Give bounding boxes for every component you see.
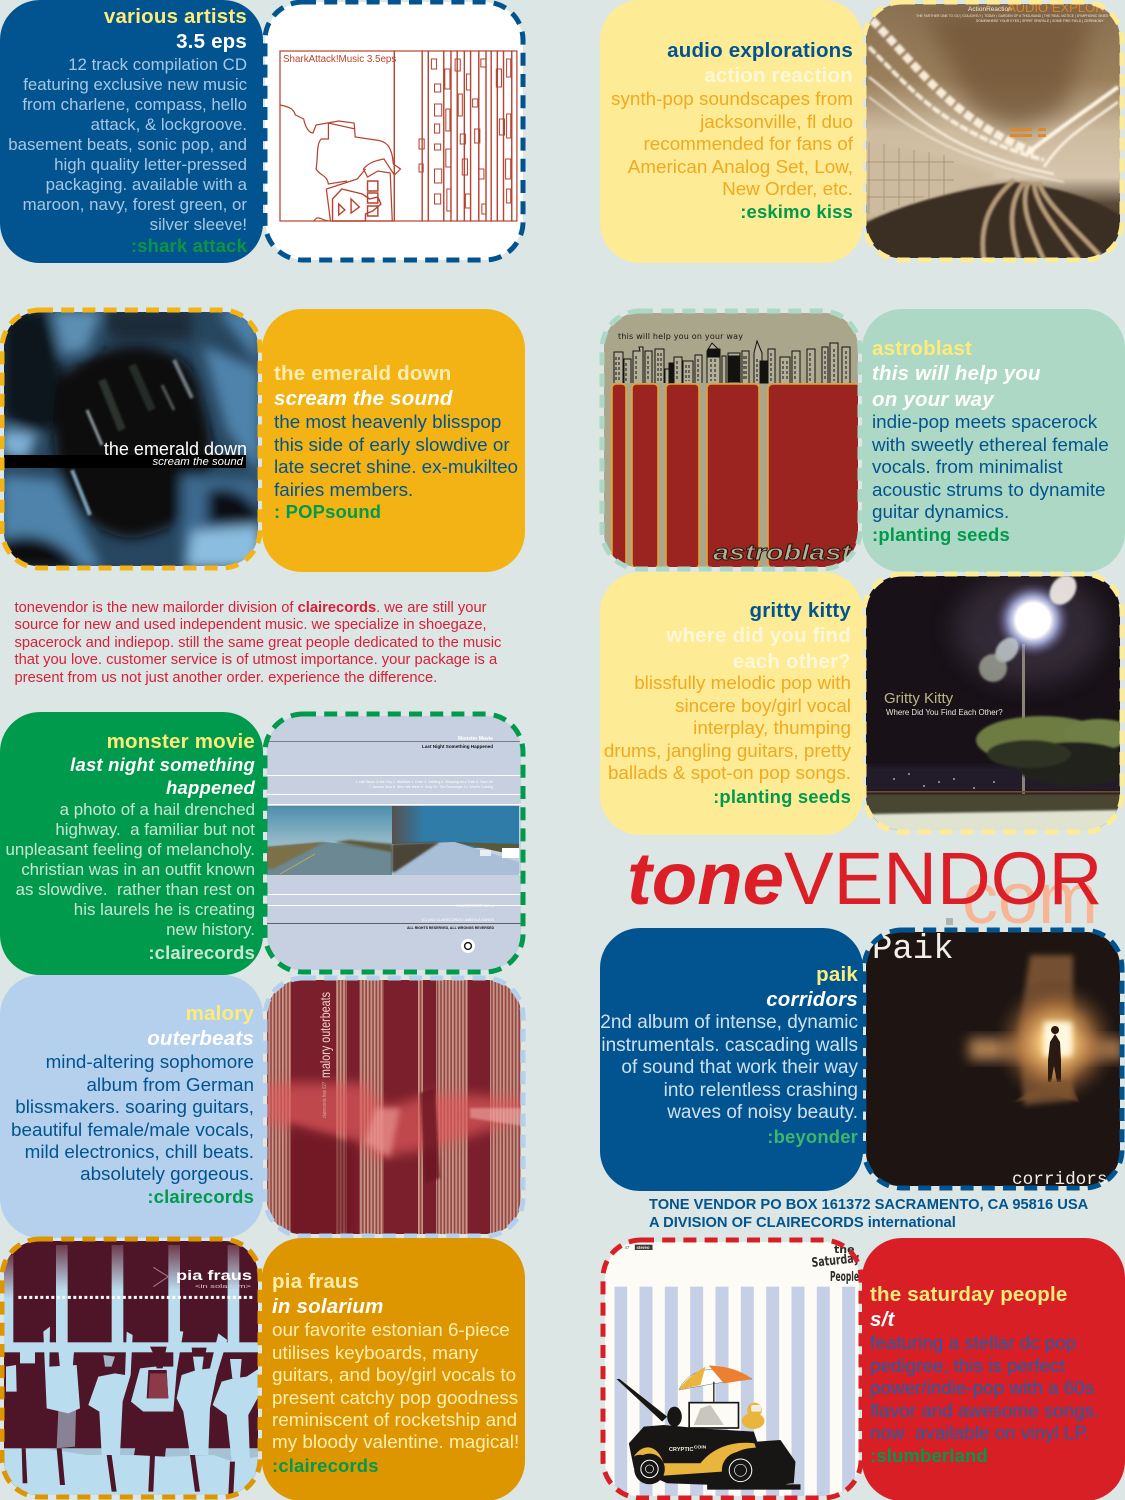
description: drums, jangling guitars, pretty	[604, 740, 851, 761]
album title	[666, 624, 851, 672]
description: acoustic strums to dynamite	[872, 479, 1106, 500]
artist heading: audio explorations	[667, 39, 853, 62]
album cover: monster movie: 1. Hail Storm in the City 2. Starlines 3. Drive 4. Nothing 5. Sleeping on a Train 6. Sea Life	[355, 780, 493, 784]
description: mild electronics, chill beats.	[25, 1141, 254, 1162]
description: synth-pop soundscapes from	[611, 88, 853, 109]
album cover: monster movie: CLAIRECORDS 148 cd	[456, 904, 494, 908]
artist heading: malory	[186, 1002, 254, 1025]
album cover: monster movie	[262, 712, 526, 974]
ground	[864, 810, 1122, 832]
description: this side of early slowdive or	[274, 434, 510, 455]
description: album from German	[86, 1074, 254, 1095]
description: New Order, etc.	[722, 178, 853, 199]
album cover: the saturday people: COIN	[694, 1444, 707, 1450]
cover title: the emerald down	[104, 439, 247, 459]
description: indie-pop meets spacerock	[872, 411, 1097, 432]
panel: the emerald down text	[262, 309, 525, 572]
logo wordmark: toneVENDOR	[627, 837, 1102, 920]
cover band name: Saturday	[811, 1251, 861, 1271]
description: of sound that work their way	[621, 1057, 858, 1078]
description: high quality letter-pressed	[54, 155, 247, 174]
window frames	[4, 1245, 240, 1342]
album title: each other?	[733, 650, 851, 672]
intro paragraph: spacerock and indiepop. still the same great people dedicated to the music	[14, 635, 501, 651]
description: utilises keyboards, many	[272, 1342, 478, 1363]
cover album name: Last Night Something Happened	[422, 744, 493, 749]
label name: :clairecords	[147, 1186, 254, 1207]
description	[6, 800, 255, 939]
album title: last night something	[70, 754, 255, 775]
label name: :shark attack	[131, 235, 247, 256]
panel: audio explorations text	[600, 0, 863, 263]
album title: 3.5 eps	[176, 30, 247, 53]
silhouette figure	[1048, 1026, 1061, 1082]
album title: in solarium	[272, 1295, 384, 1318]
description: power/indie-pop with a 60s	[870, 1377, 1094, 1398]
duck	[742, 1413, 764, 1429]
description: silver sleeve!	[150, 215, 247, 234]
cover title: Gritty Kitty	[884, 690, 954, 707]
album cover: the saturday people: CRYPTIC	[669, 1447, 693, 1453]
cover band name: Monster Movie	[458, 736, 493, 742]
description: present catchy pop goodness	[272, 1387, 518, 1408]
figure 6	[213, 1368, 259, 1462]
album title: s/t	[870, 1308, 895, 1331]
figure 4	[131, 1330, 183, 1412]
label name: : POPsound	[274, 501, 381, 522]
description	[604, 672, 851, 783]
panel: malory text	[0, 975, 263, 1238]
description: late secret shine. ex-mukilteo	[274, 456, 518, 477]
cover subtitle: scream the sound	[152, 456, 244, 468]
description	[872, 411, 1109, 522]
figure 1	[20, 1352, 35, 1364]
album title: corridors	[766, 988, 858, 1011]
description: instrumentals. cascading walls	[601, 1035, 858, 1056]
album cover: audio explorations tunnel	[862, 0, 1124, 262]
intro paragraph: source for new and used independent music. we specialize in shoegaze,	[14, 617, 487, 633]
description: attack, & lockgroove.	[91, 115, 247, 134]
album title: where did you find	[666, 624, 851, 646]
description: from charlene, compass, hello	[22, 95, 247, 114]
logo dot	[946, 918, 953, 925]
label name: :eskimo kiss	[740, 201, 853, 222]
description: waves of noisy beauty.	[667, 1102, 858, 1123]
skyline	[614, 341, 850, 383]
panel: monster movie text	[0, 712, 263, 975]
cover subtitle: ActionReaction	[968, 6, 1012, 13]
cover band name: the	[834, 1243, 855, 1256]
description	[870, 1332, 1099, 1443]
description: beautiful female/male vocals,	[11, 1119, 254, 1140]
description: mind-altering sophomore	[46, 1051, 254, 1072]
album title: happened	[166, 777, 255, 798]
description: reminiscent of rocketship and	[272, 1409, 517, 1430]
description	[600, 1012, 858, 1123]
figure 2	[43, 1327, 80, 1413]
description	[8, 55, 247, 234]
label name: :planting seeds	[713, 786, 851, 807]
album cover: astroblast	[600, 308, 862, 572]
description: unpleasant feeling of melancholy.	[6, 840, 255, 859]
cover band name: Paik	[872, 931, 954, 969]
description: 2nd album of intense, dynamic	[600, 1012, 858, 1033]
artist heading: the emerald down	[274, 362, 451, 385]
description: as slowdive. rather than rest on	[16, 880, 255, 899]
band wordmark: astroblast	[713, 540, 853, 565]
label name: :planting seeds	[872, 524, 1010, 545]
photo: rainy highway	[265, 806, 519, 875]
artist heading: various artists	[104, 5, 247, 28]
album cover: paik corridors	[862, 928, 1124, 1190]
cover band name	[811, 1243, 861, 1285]
cover album name: <in solarium>	[195, 1284, 251, 1290]
label name: :clairecords	[272, 1454, 379, 1476]
album title	[872, 362, 1041, 411]
album cover: monster movie: 7. Around Now 8. Here We Were 9. Gray 10. The Passenger 11. What's Coming	[369, 785, 493, 789]
figure 5	[177, 1333, 227, 1455]
cover band name: People	[830, 1270, 859, 1285]
intro paragraph: present from us not just another order. experience the difference.	[14, 670, 437, 686]
cover band name: pia fraus	[176, 1267, 252, 1283]
panel: paik text	[600, 928, 863, 1191]
logo suffix .com: com	[962, 859, 1098, 939]
description: our favorite estonian 6-piece	[272, 1319, 510, 1340]
album title: this will help you	[872, 362, 1041, 385]
album cover: gritty kitty	[862, 572, 1124, 834]
description: absolutely gorgeous.	[80, 1163, 254, 1184]
panel: various artists text	[0, 0, 263, 263]
description: guitar dynamics.	[872, 501, 1009, 522]
description: ballads & spot-on pop songs.	[608, 762, 851, 783]
album cover: malory outerbeats	[262, 976, 526, 1238]
cover catalog line: clairecords free 027	[322, 1082, 328, 1118]
description	[272, 1319, 519, 1452]
description: recommended for fans of	[644, 133, 853, 154]
artist heading: gritty kitty	[750, 599, 851, 622]
album cover: the emerald down	[0, 308, 262, 570]
description: guitars, and boy/girl vocals to	[272, 1364, 516, 1385]
description: vocals. from minimalist	[872, 456, 1063, 477]
album title: on your way	[872, 388, 994, 411]
description: jacksonville, fl duo	[700, 111, 853, 132]
cover tagline: this will help you on your way	[618, 332, 743, 341]
description: 12 track compilation CD	[68, 55, 247, 74]
description: the most heavenly blisspop	[274, 411, 501, 432]
artist heading: paik	[816, 963, 858, 986]
description: now available on vinyl LP.	[870, 1422, 1090, 1443]
artist heading: monster movie	[107, 730, 255, 753]
album title: action reaction	[704, 64, 853, 87]
chevron	[153, 1267, 168, 1287]
album title: scream the sound	[274, 387, 453, 410]
description: a photo of a hail drenched	[60, 800, 255, 818]
intro paragraph: tonevendor is the new mailorder division of clairecords. we are still your	[14, 600, 487, 616]
description: packaging. available with a	[46, 175, 247, 194]
description: sincere boy/girl vocal	[675, 695, 851, 716]
album cover: monster movie: (C) 2002 CLAIRECORDS / AMERICA SONGS	[422, 918, 495, 922]
description: his laurels he is creating	[74, 900, 255, 919]
description: blissmakers. soaring guitars,	[15, 1096, 254, 1117]
album title: outerbeats	[147, 1027, 254, 1050]
car	[616, 1379, 667, 1422]
description: featuring exclusive new music	[23, 75, 247, 94]
panel: gritty kitty text	[600, 572, 863, 835]
description	[274, 411, 518, 500]
umbrella	[679, 1369, 752, 1390]
waving figures	[6, 1327, 259, 1462]
logo: toneVENDOR	[627, 837, 1102, 939]
album cover: audio explorations tunnel: SOMEWHERE YOUR EYES | SPIRIT SPARKLE | SOME FIRE FIELD | CEREMONY	[976, 19, 1104, 23]
street lamp	[997, 584, 1069, 656]
artist heading: the saturday people	[870, 1283, 1067, 1306]
red bars	[612, 384, 862, 569]
label name: :beyonder	[767, 1126, 858, 1146]
description	[611, 88, 853, 199]
description: maroon, navy, forest green, or	[23, 195, 247, 214]
stripes	[614, 1287, 855, 1500]
description: highway. a familiar but not	[55, 820, 255, 839]
mailing address	[649, 1197, 1088, 1230]
panel: astroblast text	[862, 309, 1125, 572]
description: basement beats, sonic pop, and	[8, 135, 247, 154]
description	[11, 1051, 254, 1184]
cover album name: corridors	[1012, 1170, 1108, 1190]
cover title: malory outerbeats	[317, 992, 333, 1078]
album cover: audio explorations tunnel: THE FARTHER ONE TO GO | GOLIGHTLY | TODAY | GARDEN OF A THOUSAND | THE REAL NOTICE | SYMPHONIC SKIES	[916, 14, 1109, 18]
mailing address: TONE VENDOR PO BOX 161372 SACRAMENTO, CA 95816 USA	[649, 1197, 1088, 1213]
intro paragraph	[14, 600, 501, 686]
intro paragraph: that you love. customer service is of utmost importance. your package is a	[14, 652, 497, 668]
description: fairies members.	[274, 479, 413, 500]
description: blissfully melodic pop with	[634, 672, 851, 693]
label logo	[461, 939, 475, 953]
panel: the saturday people text	[862, 1238, 1125, 1500]
label name: :slumberland	[870, 1445, 988, 1466]
mailing address: A DIVISION OF CLAIRECORDS international	[649, 1214, 956, 1230]
dotted line	[18, 1296, 252, 1299]
cover subtitle: Where Did You Find Each Other?	[886, 708, 1003, 717]
description: christian was in an outfit known	[21, 860, 255, 879]
description: new history.	[166, 920, 255, 939]
album cover: monster movie: ALL RIGHTS RESERVED, ALL WRONGS REVERSED	[407, 926, 494, 930]
album cover: the saturday people: 47	[624, 1245, 630, 1250]
tree	[976, 716, 1125, 786]
description: American Analog Set, Low,	[628, 156, 853, 177]
description: with sweetly ethereal female	[872, 434, 1109, 455]
description: interplay, thumping	[693, 717, 851, 738]
cover caption: SharkAttack!Music 3.5eps	[283, 54, 396, 65]
label name: :clairecords	[148, 942, 255, 962]
figure 3	[88, 1332, 133, 1455]
album cover: pia fraus	[0, 1236, 262, 1500]
description: my bloody valentine. magical!	[272, 1431, 519, 1452]
black title bar	[2, 455, 246, 468]
description: pedigree, this is perfect	[870, 1355, 1065, 1376]
album title	[70, 754, 256, 798]
description: into relentless crashing	[664, 1080, 858, 1101]
panel: pia fraus text	[262, 1238, 525, 1500]
artist heading: pia fraus	[272, 1270, 359, 1293]
street lamp pole	[1022, 644, 1025, 794]
album cover: the saturday people: stereo	[636, 1245, 650, 1250]
artist heading: astroblast	[872, 337, 972, 360]
album cover: shark attack	[262, 0, 526, 262]
description: featuring a stellar dc pop	[870, 1332, 1076, 1353]
album cover: the saturday people	[600, 1238, 863, 1500]
catalog badge	[635, 1245, 652, 1250]
description: flavor and awesome songs.	[870, 1400, 1099, 1421]
